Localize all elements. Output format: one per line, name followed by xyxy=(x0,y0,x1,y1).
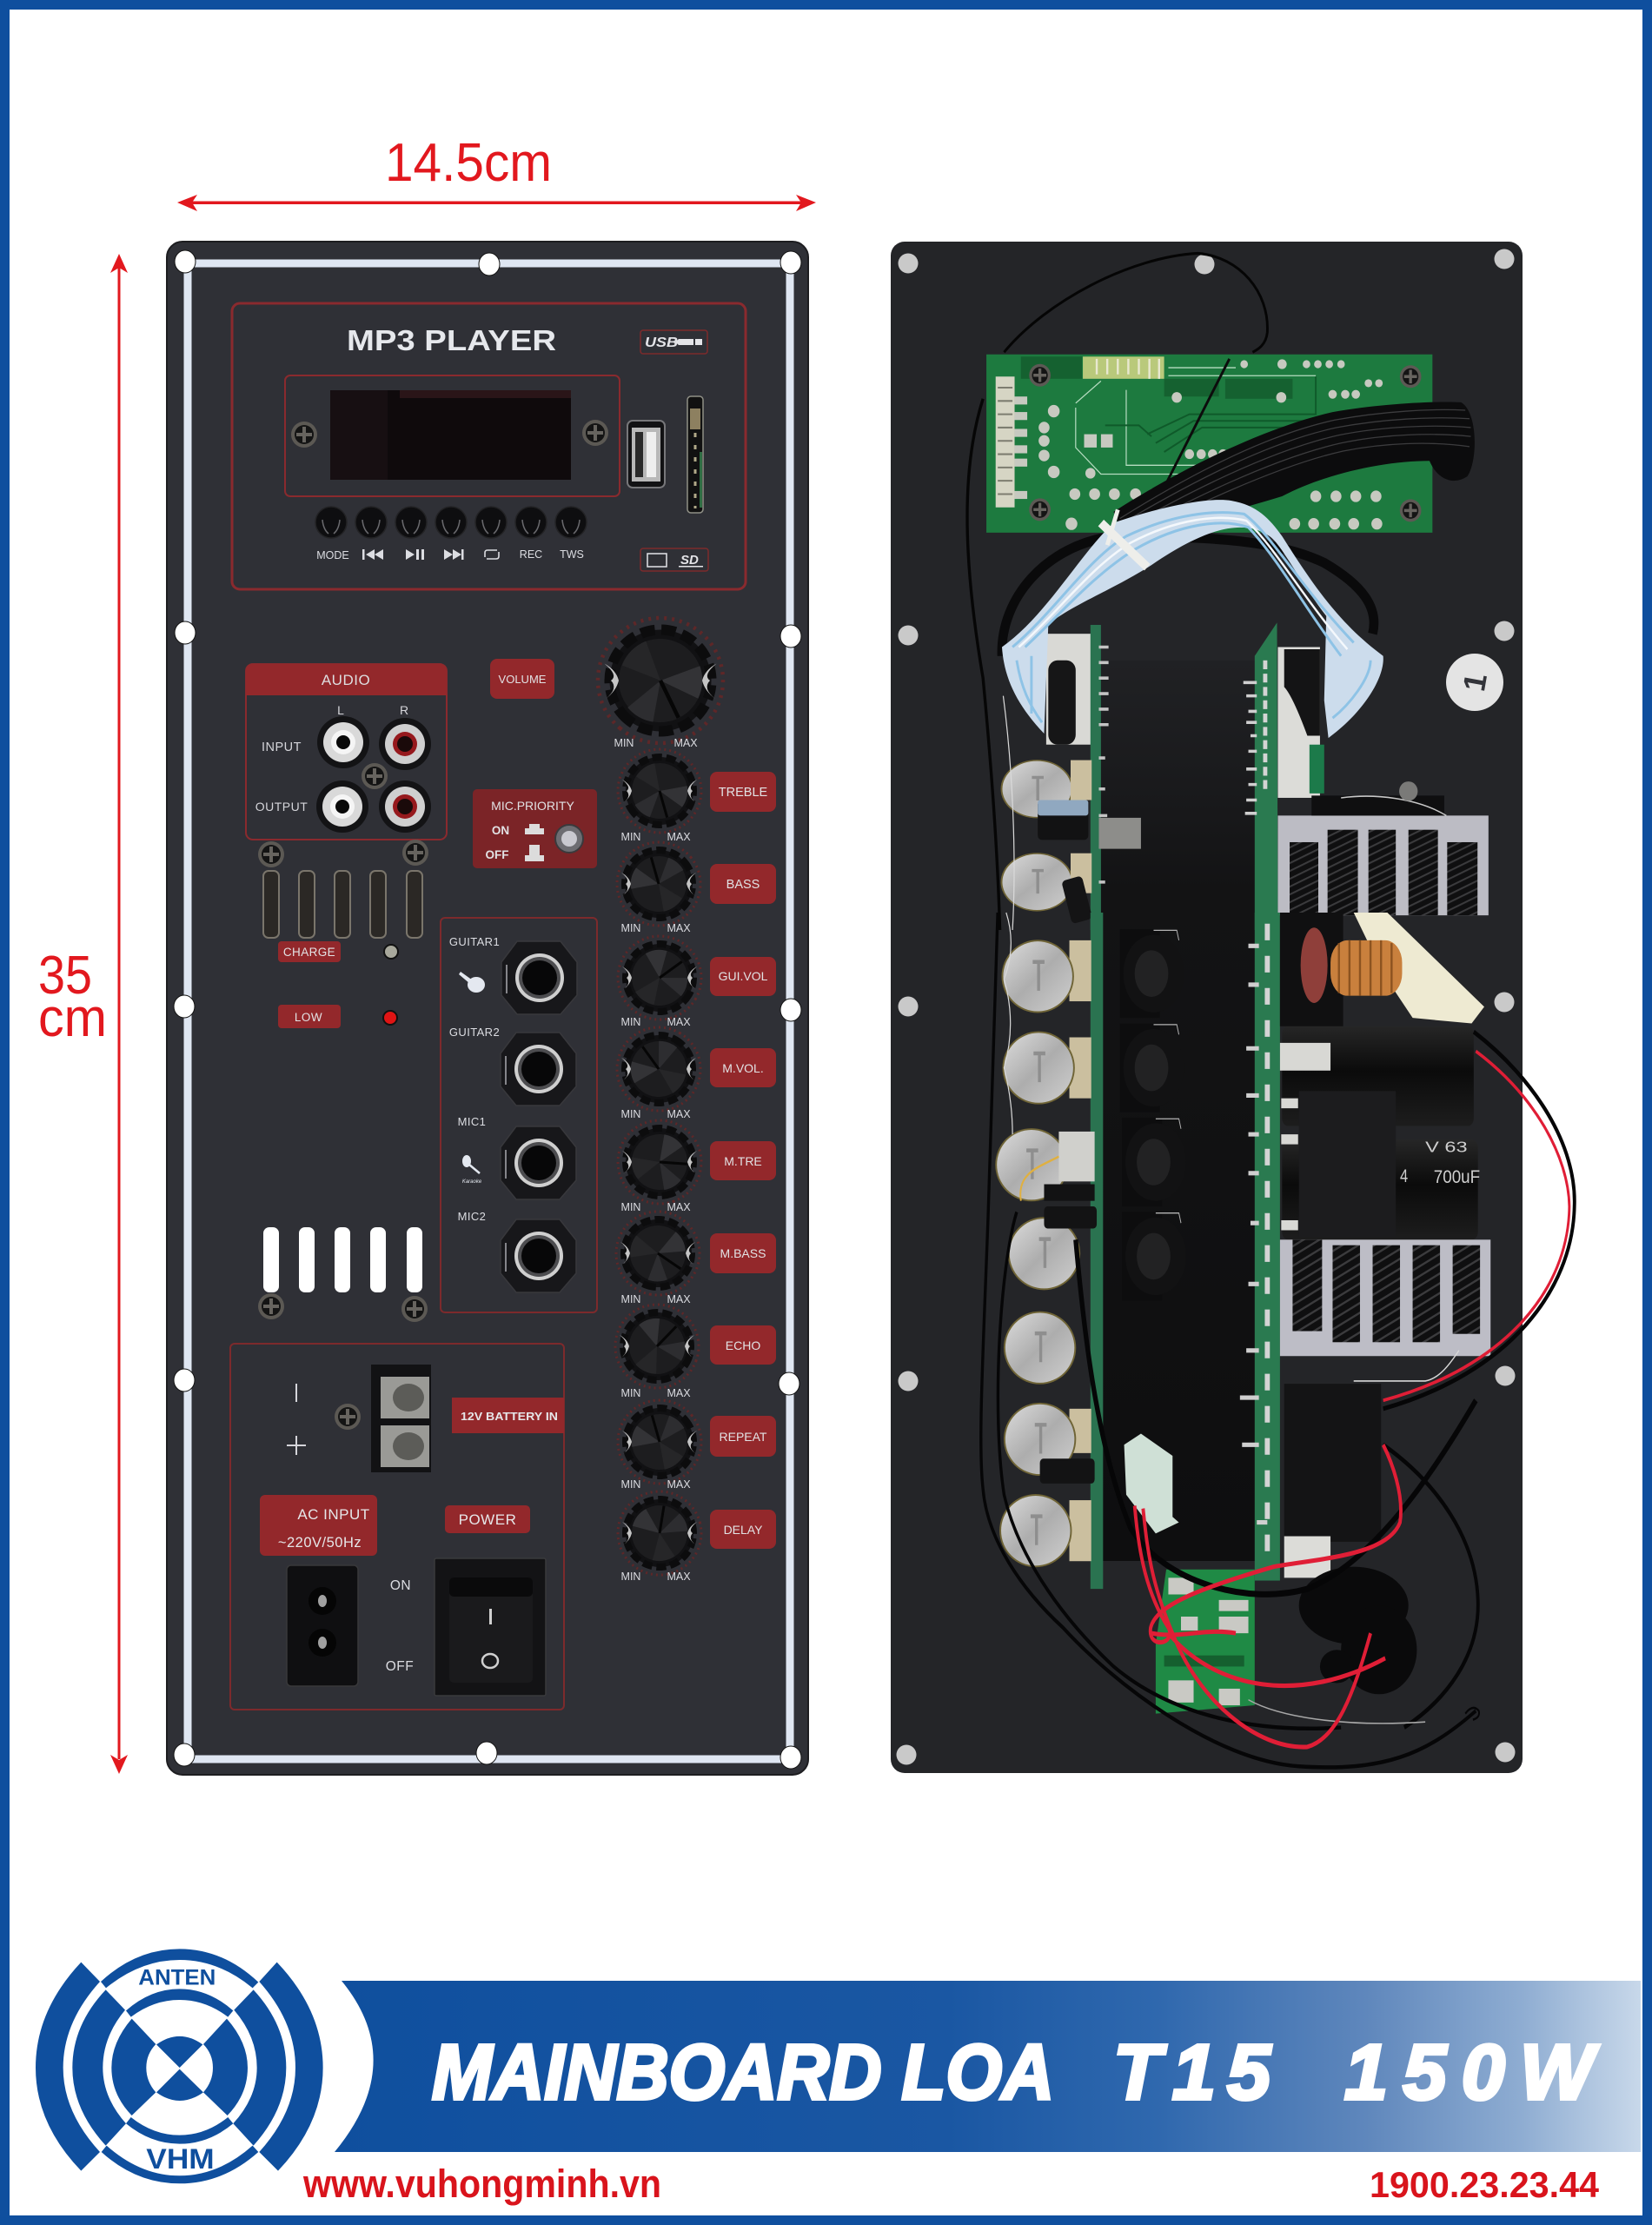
badge: POWER: POWER xyxy=(459,1511,516,1528)
knob: M.TRE xyxy=(606,1108,776,1216)
knob: M.VOL.: M.VOL. xyxy=(722,1061,764,1075)
panel: power section: OFF xyxy=(386,1659,414,1674)
upper half of rear side xyxy=(967,253,1489,930)
knob: VOLUME xyxy=(573,593,748,768)
knob: ECHO: MIN xyxy=(621,1387,640,1399)
badge: AC input xyxy=(260,1495,377,1556)
mounting holes xyxy=(174,250,801,1769)
knob: TREBLE xyxy=(600,732,776,850)
panel: mic priority: MIC.PRIORITY xyxy=(491,799,574,813)
choke coil and plug xyxy=(1280,913,1484,1026)
badge: AC input: ~220V/50Hz xyxy=(278,1535,362,1551)
large capacitors: 700uF xyxy=(1434,1167,1480,1188)
red wires xyxy=(1135,1051,1569,1747)
arrow: height xyxy=(110,254,128,1774)
knob: M.VOL. xyxy=(601,1012,776,1126)
knob: VOLUME: MIN xyxy=(614,737,634,749)
mounting holes xyxy=(897,249,1516,1764)
right vertical board xyxy=(1244,622,1324,930)
knob: M.BASS: MIN xyxy=(621,1293,640,1305)
black wires xyxy=(981,913,1575,1767)
panel: rear circuit side xyxy=(891,242,1575,1773)
potentiometers: lower xyxy=(995,940,1091,1567)
potentiometers: upper xyxy=(1001,760,1091,912)
website address: www.vuhongminh.vn xyxy=(302,2162,661,2206)
knob: M.TRE: MIN xyxy=(621,1201,640,1213)
black wire loop under PCB xyxy=(1002,536,1374,656)
dimension label 14.5cm: 14.5cm xyxy=(385,133,552,193)
knob: BASS xyxy=(600,825,776,943)
large capacitors: 4 xyxy=(1400,1166,1408,1187)
icon: USB badge xyxy=(640,330,707,354)
knob: M.BASS: M.BASS xyxy=(720,1246,766,1260)
black jack sockets xyxy=(1120,929,1186,1300)
knob: DELAY: MIN xyxy=(621,1571,640,1583)
logo text: ANTEN: ANTEN xyxy=(138,1965,216,1989)
thin white wires xyxy=(1004,913,1459,1724)
USB port xyxy=(627,421,665,488)
small connector and capacitors xyxy=(1040,1132,1097,1484)
knob: GUI.VOL: MAX xyxy=(667,1016,691,1028)
height dimension: 35 cm xyxy=(38,254,128,1774)
knob: ECHO xyxy=(603,1292,776,1400)
knob: BASS: MIN xyxy=(621,922,640,934)
indicator: LOW: LOW xyxy=(295,1011,322,1024)
icon: SD badge xyxy=(640,548,708,571)
button labels: REC xyxy=(520,548,542,561)
left vertical board xyxy=(1046,625,1109,930)
SD card slot xyxy=(687,396,703,513)
panel: audio inputs: AUDIO xyxy=(322,672,370,688)
panel: knob column xyxy=(573,593,776,1584)
heading: MP3 PLAYER: MP3 PLAYER xyxy=(347,324,556,356)
panel: audio inputs xyxy=(246,664,447,840)
panel: guitar and mic jacks: MIC1 xyxy=(458,1115,486,1128)
badge: POWER xyxy=(445,1505,530,1533)
icon: karaoke microphone: Karaoke xyxy=(462,1179,482,1185)
blue ribbon cable xyxy=(1002,500,1383,738)
button labels xyxy=(316,548,584,561)
right board lower xyxy=(1240,913,1280,1581)
indicator: CHARGE: CHARGE xyxy=(283,946,335,959)
icon: guitar xyxy=(459,972,485,993)
panel: audio inputs: INPUT xyxy=(262,741,302,754)
banner: product title xyxy=(335,1981,1641,2152)
large capacitors xyxy=(1280,1026,1480,1239)
left board lower xyxy=(1091,913,1103,1589)
badge: 12V BATTERY IN: 12V BATTERY IN xyxy=(461,1410,558,1423)
shadow between boards xyxy=(1101,661,1255,1561)
logo: Anten VHM xyxy=(36,1949,323,2183)
panel: guitar and mic jacks: GUITAR1 xyxy=(449,935,500,948)
title text: 150W xyxy=(1344,2029,1600,2116)
display PCB xyxy=(986,355,1432,533)
title text: T15 xyxy=(1113,2029,1272,2116)
panel: mic priority: OFF xyxy=(485,848,509,861)
knob: GUI.VOL xyxy=(602,920,776,1035)
transformer block xyxy=(1284,1384,1381,1542)
knob: DELAY: DELAY xyxy=(724,1523,763,1537)
vents: lower slots with screws xyxy=(258,1227,428,1322)
knob: REPEAT: MIN xyxy=(621,1478,640,1491)
white power connector xyxy=(1125,1434,1330,1577)
panel: mic priority: ON xyxy=(492,824,509,837)
knob: M.TRE: M.TRE xyxy=(724,1154,762,1168)
dimension label 35 cm: cm xyxy=(38,988,107,1048)
knob: GUI.VOL: MIN xyxy=(621,1016,640,1028)
icon: karaoke microphone xyxy=(462,1155,482,1185)
panel: mic priority xyxy=(473,789,597,868)
large capacitors: V 63 xyxy=(1425,1139,1468,1156)
panel: front faceplate xyxy=(167,242,808,1775)
sticker: number 1: 1 xyxy=(1456,671,1494,694)
panel: audio inputs: R xyxy=(400,703,408,717)
capacitors and bracket xyxy=(1038,800,1141,924)
knob: TREBLE: MIN xyxy=(621,831,640,843)
dimension label 35 cm: 35 xyxy=(38,946,92,1006)
hotline number: 1900.23.23.44 xyxy=(1370,2164,1600,2205)
knob: M.TRE: MAX xyxy=(667,1201,691,1213)
display module xyxy=(285,375,620,496)
panel: audio inputs: OUTPUT xyxy=(255,800,308,814)
title text: MAINBOARD LOA xyxy=(432,2029,1052,2116)
indicator: CHARGE xyxy=(278,941,398,962)
badge: AC input: AC INPUT xyxy=(297,1506,370,1523)
vents: upper slots with screws xyxy=(258,840,428,938)
AC socket xyxy=(287,1565,358,1686)
knob: REPEAT: MAX xyxy=(667,1478,691,1491)
knob: REPEAT: REPEAT xyxy=(720,1430,767,1444)
panel: audio inputs: L xyxy=(337,703,344,717)
panel: MP3 player section xyxy=(232,303,746,589)
knob: DELAY: MAX xyxy=(667,1571,691,1583)
small input PCB xyxy=(1156,1570,1255,1714)
knob: ECHO: MAX xyxy=(667,1387,691,1399)
knob: DELAY xyxy=(608,1482,776,1584)
knob: BASS: BASS xyxy=(726,878,760,892)
button labels: MODE xyxy=(316,549,349,561)
lower half of rear side xyxy=(981,913,1575,1767)
bridge rectifier xyxy=(1299,1091,1396,1237)
knob: ECHO: ECHO xyxy=(726,1338,760,1352)
knob: VOLUME: MAX xyxy=(673,737,698,749)
indicator: LOW xyxy=(278,1005,397,1028)
knob: M.BASS xyxy=(609,1205,776,1305)
badge: VOLUME xyxy=(490,659,554,699)
panel: power section xyxy=(230,1344,564,1710)
button labels: TWS xyxy=(560,548,584,561)
knob: TREBLE: MAX xyxy=(667,831,691,843)
knob: M.VOL.: MIN xyxy=(621,1108,640,1120)
knob: BASS: MAX xyxy=(667,922,691,934)
badge: 12V BATTERY IN xyxy=(452,1398,564,1433)
logo text: VHM: VHM xyxy=(146,2143,215,2175)
battery terminal xyxy=(371,1365,431,1472)
panel: guitar and mic jacks xyxy=(441,918,597,1312)
lower heatsink xyxy=(1280,1239,1490,1356)
panel: guitar and mic jacks: GUITAR2 xyxy=(449,1026,500,1039)
sticker: number 1 xyxy=(1446,654,1503,711)
long black wire upper xyxy=(967,399,1000,930)
power rocker switch xyxy=(435,1558,546,1696)
panel: power section: ON xyxy=(390,1578,411,1593)
arrow: width xyxy=(177,195,816,211)
knob: M.BASS: MAX xyxy=(667,1293,691,1305)
knob: M.VOL.: MAX xyxy=(667,1108,691,1120)
icon: SD badge: SD xyxy=(680,553,699,568)
knob: TREBLE: TREBLE xyxy=(719,786,768,800)
knob: GUI.VOL: GUI.VOL xyxy=(719,969,768,983)
black ribbon cable xyxy=(1113,402,1475,545)
panel: guitar and mic jacks: MIC2 xyxy=(458,1210,486,1223)
upper heatsink xyxy=(1277,781,1489,915)
thin antenna wire xyxy=(1004,253,1267,352)
badge: VOLUME: VOLUME xyxy=(499,673,547,686)
knob: REPEAT xyxy=(600,1383,776,1501)
audio header xyxy=(246,664,447,695)
icon: USB badge: USB xyxy=(645,335,678,350)
control buttons xyxy=(315,507,587,538)
ferrite choke blob xyxy=(1299,1567,1416,1694)
width dimension: 14.5cm xyxy=(177,133,816,211)
